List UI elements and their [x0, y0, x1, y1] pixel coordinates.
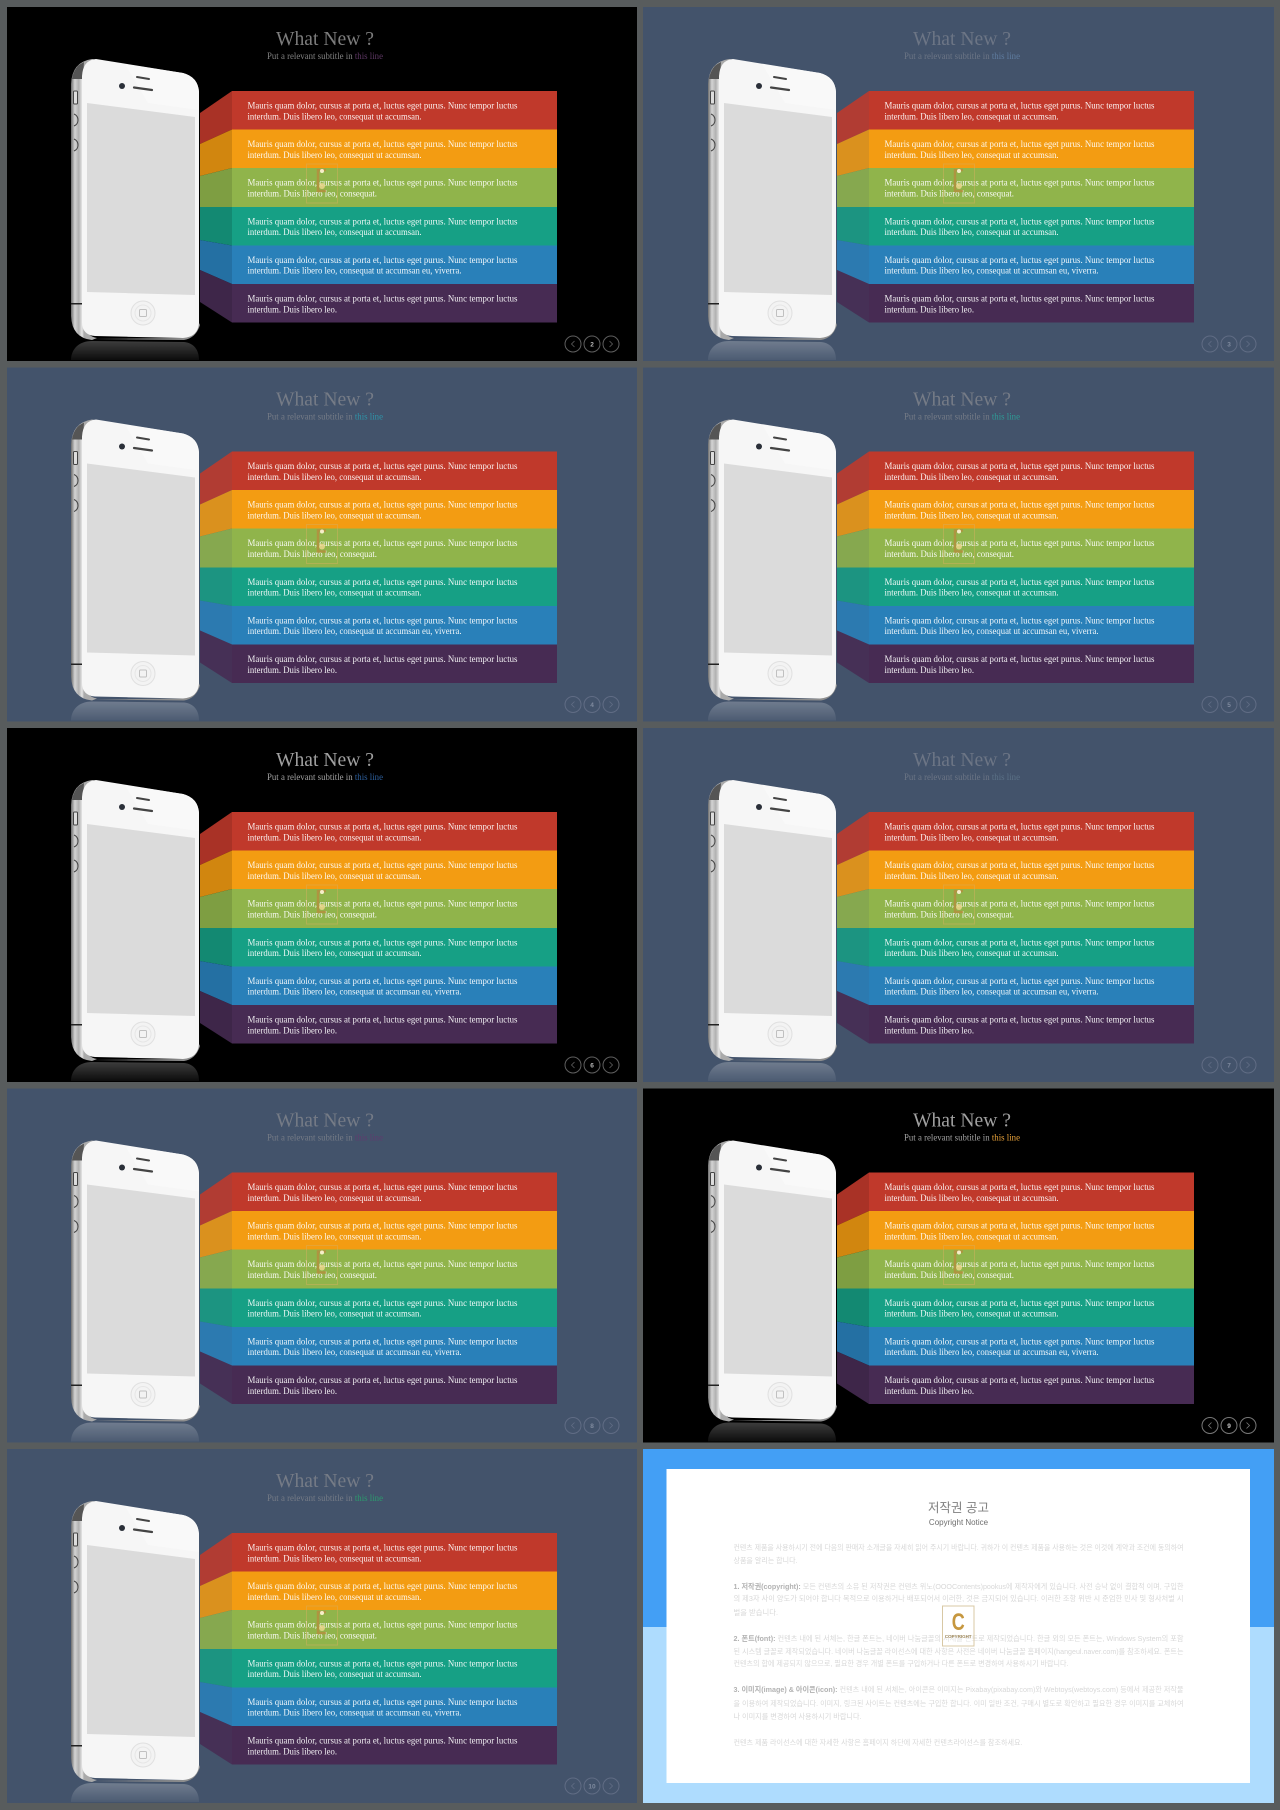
text block: bands: Mauris quam dolor, cursus at porta et, luctus eget purus. Nunc tempor luctus [248, 140, 518, 150]
text block: section 2 font: 컨텐츠의 합에 제공되지 않으므로, 필요한 경우 개별 폰트를 구입하거나 다른 폰트로 변경하여 사용하시기 바랍니다. [734, 1658, 1068, 1668]
text block: section 3 image and icon: 3. 이미지(image) & 아이콘(icon): 컨텐츠 내에 된 서체는, 아이콘은 이미지는 Pixabay(pixabay.com)와 Webtoys(webtoys.com) 등에서 제공한 저작물 [734, 1684, 1184, 1694]
text block: closing note: 컨텐츠 제품 라이선스에 대한 자세한 사항은 홈페이지 하단에 자세한 컨텐츠라이선스를 참조하세요. [734, 1737, 1022, 1747]
text block: intro [734, 1542, 1184, 1565]
icon: phone [71, 1501, 200, 1802]
text block: bands: interdum. Duis libero leo, consequat ut accumsan. [884, 112, 1058, 122]
text block: bands: Mauris quam dolor, cursus at porta et, luctus eget purus. Nunc tempor luctus [248, 1260, 518, 1270]
text block: intro: 컨텐츠 제품을 사용하시기 전에 다음의 판매자 소개글을 자세히 읽어 주시기 바랍니다. 귀하가 이 컨텐츠 제품을 사용하는 것은 이것에 계약과 조건에 동의하여 [734, 1542, 1184, 1552]
text block: bands: Mauris quam dolor, cursus at porta et, luctus eget purus. Nunc tempor luctus [248, 256, 518, 266]
page navigation: 6 [590, 1062, 594, 1070]
colour bands [837, 91, 1194, 322]
text block: bands: interdum. Duis libero leo, consequat ut accumsan. [248, 833, 422, 843]
text block: bands: Mauris quam dolor, cursus at porta et, luctus eget purus. Nunc tempor luctus [248, 938, 518, 948]
text block: bands: interdum. Duis libero leo, consequat ut accumsan. [248, 1554, 422, 1564]
text block: bands: interdum. Duis libero leo, consequat. [248, 190, 377, 200]
text block: bands: Mauris quam dolor, cursus at porta et, luctus eget purus. Nunc tempor luctus [884, 938, 1155, 948]
colour bands [837, 452, 1194, 683]
text block: bands: Mauris quam dolor, cursus at porta et, luctus eget purus. Nunc tempor luctus [248, 101, 518, 111]
icon: phone [71, 59, 200, 360]
text block: section 2 font [734, 1633, 1184, 1668]
text block: bands: Mauris quam dolor, cursus at porta et, luctus eget purus. Nunc tempor luctus [884, 1015, 1155, 1025]
text block: section 1 copyright: 의 제3자 사이 양도가 되어야 합니다 목적으로 이용하거나 배포되어서 이러한, 것은 금지되어 있습니다. 이러한 조항 위반 시 준엄한 민사 및 형사처벌 시 [734, 1593, 1184, 1603]
text block: bands: interdum. Duis libero leo, consequat ut accumsan eu, viverra. [248, 627, 462, 637]
text block: bands [248, 822, 518, 1036]
page navigation [565, 1057, 619, 1073]
page navigation: 7 [1227, 1062, 1231, 1070]
watermark [306, 524, 338, 564]
text block: bands: interdum. Duis libero leo, consequat ut accumsan eu, viverra. [248, 1709, 462, 1719]
watermark: copyright badge [942, 1606, 974, 1646]
text block: bands: interdum. Duis libero leo, consequat. [884, 911, 1014, 921]
text block: bands: interdum. Duis libero leo, consequat ut accumsan. [248, 1310, 422, 1320]
page navigation: 8 [590, 1423, 594, 1430]
panel: slide 9 black [643, 1088, 1274, 1442]
text block: bands: Mauris quam dolor, cursus at porta et, luctus eget purus. Nunc tempor luctus [248, 1543, 518, 1553]
text block: bands: Mauris quam dolor, cursus at porta et, luctus eget purus. Nunc tempor luctus [884, 1183, 1155, 1193]
text block: bands: interdum. Duis libero leo, consequat ut accumsan. [248, 1593, 422, 1603]
panel: slide 5 slate [643, 368, 1274, 722]
text block: bands: interdum. Duis libero leo, consequat ut accumsan. [248, 112, 422, 122]
colour bands [200, 452, 557, 683]
text block: bands: interdum. Duis libero leo, consequat. [248, 1632, 377, 1642]
text block: bands: interdum. Duis libero leo, consequat ut accumsan. [248, 949, 422, 959]
text block: bands: Mauris quam dolor, cursus at porta et, luctus eget purus. Nunc tempor luctus [884, 101, 1155, 111]
text block: bands: Mauris quam dolor, cursus at porta et, luctus eget purus. Nunc tempor luctus [884, 256, 1155, 266]
text block: bands: interdum. Duis libero leo, consequat ut accumsan. [884, 512, 1058, 522]
page navigation [1202, 696, 1256, 712]
heading: copyright notice Korean: 저작권 공고 [928, 1501, 989, 1515]
panel: slide 4 slate [7, 368, 637, 722]
text block: bands: interdum. Duis libero leo, consequat ut accumsan. [248, 872, 422, 882]
title: What New ? [276, 1470, 374, 1492]
watermark [306, 1246, 338, 1284]
text block: bands: interdum. Duis libero leo, consequat ut accumsan. [248, 1232, 422, 1242]
title: What New ? [913, 388, 1011, 410]
text block: bands: Mauris quam dolor, cursus at porta et, luctus eget purus. Nunc tempor luctus [248, 1183, 518, 1193]
text block: bands: interdum. Duis libero leo, consequat. [884, 190, 1014, 200]
subtitle: Put a relevant subtitle in this line [267, 1494, 383, 1504]
text block: bands: Mauris quam dolor, cursus at porta et, luctus eget purus. Nunc tempor luctus [884, 539, 1155, 549]
text block: bands: interdum. Duis libero leo, consequat. [248, 1271, 377, 1281]
text block: bands: interdum. Duis libero leo, consequat. [248, 911, 377, 921]
watermark [944, 164, 974, 203]
text block: bands: interdum. Duis libero leo, consequat ut accumsan. [248, 512, 422, 522]
page navigation: 3 [1227, 342, 1231, 348]
page navigation: 9 [1227, 1423, 1231, 1430]
text block: bands: Mauris quam dolor, cursus at porta et, luctus eget purus. Nunc tempor luctus [248, 500, 518, 510]
text block: bands: interdum. Duis libero leo, consequat ut accumsan. [884, 1194, 1058, 1204]
text block: bands: interdum. Duis libero leo, consequat ut accumsan. [884, 1310, 1058, 1320]
text block: bands: interdum. Duis libero leo. [884, 1387, 974, 1397]
watermark [306, 885, 338, 924]
page navigation [1202, 1057, 1256, 1073]
text block: bands: interdum. Duis libero leo, consequat ut accumsan eu, viverra. [248, 1348, 462, 1358]
text block: bands: interdum. Duis libero leo, consequat ut accumsan. [248, 473, 422, 483]
text block: bands: Mauris quam dolor, cursus at porta et, luctus eget purus. Nunc tempor luctus [884, 578, 1155, 588]
text block: section 1 copyright: 벌을 받습니다. [734, 1607, 778, 1617]
icon: phone [708, 780, 837, 1081]
text block: bands: interdum. Duis libero leo, consequat ut accumsan eu, viverra. [884, 988, 1098, 998]
text block: bands: interdum. Duis libero leo. [884, 305, 974, 315]
text block: bands: interdum. Duis libero leo, consequat ut accumsan. [248, 151, 422, 161]
text block: bands: interdum. Duis libero leo, consequat ut accumsan. [248, 1194, 422, 1204]
text block: bands: Mauris quam dolor, cursus at porta et, luctus eget purus. Nunc tempor luctus [248, 1582, 518, 1592]
title: What New ? [913, 1110, 1011, 1132]
text block: bands: interdum. Duis libero leo, consequat ut accumsan eu, viverra. [884, 267, 1098, 277]
icon: phone [708, 1140, 837, 1442]
text block: bands: Mauris quam dolor, cursus at porta et, luctus eget purus. Nunc tempor luctus [248, 1222, 518, 1232]
text block: section 2 font: 2. 폰트(font): 컨텐츠 내에 된 서체는, 한글 폰트는, 네이버 나눔글꼴의 서체를 폰트로 제작되었습니다. 한글 외의 모든 폰트는, Windows System의 포함 [734, 1633, 1184, 1643]
text block: bands: Mauris quam dolor, cursus at porta et, luctus eget purus. Nunc tempor luctus [248, 1659, 518, 1669]
text block: bands [248, 1183, 518, 1397]
text block: bands: Mauris quam dolor, cursus at porta et, luctus eget purus. Nunc tempor luctus [884, 179, 1155, 189]
text block: bands: Mauris quam dolor, cursus at porta et, luctus eget purus. Nunc tempor luctus [248, 1621, 518, 1631]
watermark [944, 524, 974, 564]
text block: bands: interdum. Duis libero leo. [248, 1747, 337, 1757]
page navigation [1202, 336, 1256, 352]
text block: section 3 image and icon: 나 이미지를 변경하여 사용하시기 바랍니다. [734, 1711, 862, 1721]
text block: intro: 상품을 알리는 합니다. [734, 1555, 798, 1565]
colour bands [200, 1172, 557, 1404]
text block: bands [884, 101, 1155, 315]
colour bands [200, 91, 557, 322]
subtitle: Put a relevant subtitle in this line [267, 773, 383, 783]
colour bands [200, 812, 557, 1044]
subtitle: Put a relevant subtitle in this line [904, 52, 1020, 62]
subtitle: Put a relevant subtitle in this line [904, 773, 1020, 783]
title: What New ? [913, 28, 1011, 50]
panel: slide 2 black [7, 7, 637, 361]
text block: bands: interdum. Duis libero leo, consequat ut accumsan. [884, 588, 1058, 598]
icon: phone [71, 420, 200, 720]
text block: bands: Mauris quam dolor, cursus at porta et, luctus eget purus. Nunc tempor luctus [248, 1015, 518, 1025]
text block: section 1 copyright: 1. 저작권(copyright): 모든 컨텐츠의 소유 된 저작권은 컨텐츠 위노(OOOContents)pookus에 제작자에게 있습니다. 사전 승낙 없이 결합적 이며, 구입한 [734, 1581, 1184, 1591]
text block: bands: Mauris quam dolor, cursus at porta et, luctus eget purus. Nunc tempor luctus [248, 1376, 518, 1386]
panel: slide 10 slate [7, 1449, 637, 1803]
text block: bands: Mauris quam dolor, cursus at porta et, luctus eget purus. Nunc tempor luctus [884, 616, 1155, 626]
text block: bands: Mauris quam dolor, cursus at porta et, luctus eget purus. Nunc tempor luctus [884, 1299, 1155, 1309]
text block: bands: Mauris quam dolor, cursus at porta et, luctus eget purus. Nunc tempor luctus [884, 500, 1155, 510]
page navigation [565, 336, 619, 352]
text block: bands: Mauris quam dolor, cursus at porta et, luctus eget purus. Nunc tempor luctus [248, 616, 518, 626]
text block: bands: Mauris quam dolor, cursus at porta et, luctus eget purus. Nunc tempor luctus [884, 1222, 1155, 1232]
watermark [944, 885, 974, 924]
text block: section 2 font: 된 시스템 글꼴로 제작되었습니다. 네이버 나눔글꼴 라이선스에 대한 사항은 사전은 네이버 나눔글꼴 홈페이지(hangeul.naver.com)를 참조하세요. 폰트는 [734, 1646, 1184, 1656]
text block: bands: Mauris quam dolor, cursus at porta et, luctus eget purus. Nunc tempor luctus [884, 140, 1155, 150]
watermark: copyright badge: COPYRIGHT [945, 1634, 972, 1639]
text block: section 1 copyright [734, 1581, 1184, 1617]
text block: bands: Mauris quam dolor, cursus at porta et, luctus eget purus. Nunc tempor luctus [248, 217, 518, 227]
text block: bands: interdum. Duis libero leo, consequat ut accumsan eu, viverra. [884, 627, 1098, 637]
text block: bands: Mauris quam dolor, cursus at porta et, luctus eget purus. Nunc tempor luctus [884, 822, 1155, 832]
text block: bands: interdum. Duis libero leo, consequat ut accumsan eu, viverra. [248, 988, 462, 998]
text block: bands: interdum. Duis libero leo, consequat. [884, 1271, 1014, 1281]
text block: bands: interdum. Duis libero leo. [884, 1026, 974, 1036]
title: What New ? [913, 749, 1011, 771]
text block: bands [884, 822, 1155, 1036]
text block: bands: interdum. Duis libero leo, consequat ut accumsan. [248, 1670, 422, 1680]
text block: bands: interdum. Duis libero leo, consequat ut accumsan. [884, 872, 1058, 882]
text block: bands: Mauris quam dolor, cursus at porta et, luctus eget purus. Nunc tempor luctus [884, 1376, 1155, 1386]
text block: bands [248, 101, 518, 315]
panel: slide 8 slate [7, 1088, 637, 1442]
page navigation: 10 [588, 1784, 596, 1790]
watermark [306, 1606, 338, 1645]
subtitle: Put a relevant subtitle in this line [904, 1134, 1020, 1144]
text block: bands: Mauris quam dolor, cursus at porta et, luctus eget purus. Nunc tempor luctus [884, 462, 1155, 472]
text block: bands: Mauris quam dolor, cursus at porta et, luctus eget purus. Nunc tempor luctus [248, 294, 518, 304]
watermark: copyright badge: C [952, 1609, 965, 1636]
page navigation [565, 1418, 619, 1434]
text block: bands: Mauris quam dolor, cursus at porta et, luctus eget purus. Nunc tempor luctus [248, 822, 518, 832]
text block: bands: interdum. Duis libero leo, consequat ut accumsan eu, viverra. [884, 1348, 1098, 1358]
page navigation: 5 [1227, 702, 1231, 709]
text block: bands: Mauris quam dolor, cursus at porta et, luctus eget purus. Nunc tempor luctus [884, 1338, 1155, 1348]
subtitle: Put a relevant subtitle in this line [904, 412, 1020, 422]
text block: bands [248, 1543, 518, 1757]
title: What New ? [276, 28, 374, 50]
text block: section 3 image and icon [734, 1684, 1184, 1721]
text block: bands: Mauris quam dolor, cursus at porta et, luctus eget purus. Nunc tempor luctus [248, 1338, 518, 1348]
text block: bands: interdum. Duis libero leo, consequat ut accumsan. [884, 473, 1058, 483]
panel: slide 7 slate [643, 728, 1274, 1082]
text block: bands [248, 462, 518, 676]
title: What New ? [276, 388, 374, 410]
page navigation: 4 [590, 702, 594, 709]
page navigation [565, 1778, 619, 1794]
text block: bands: Mauris quam dolor, cursus at porta et, luctus eget purus. Nunc tempor luctus [248, 539, 518, 549]
text block: bands: Mauris quam dolor, cursus at porta et, luctus eget purus. Nunc tempor luctus [248, 578, 518, 588]
text block: bands: Mauris quam dolor, cursus at porta et, luctus eget purus. Nunc tempor luctus [884, 861, 1155, 871]
page navigation: 2 [590, 342, 594, 348]
text block: bands: interdum. Duis libero leo, consequat ut accumsan. [248, 588, 422, 598]
text block: bands: Mauris quam dolor, cursus at porta et, luctus eget purus. Nunc tempor luctus [248, 861, 518, 871]
text block: bands: Mauris quam dolor, cursus at porta et, luctus eget purus. Nunc tempor luctus [248, 1698, 518, 1708]
icon: phone [71, 1140, 200, 1442]
text block: bands [884, 1183, 1155, 1397]
text block: bands: Mauris quam dolor, cursus at porta et, luctus eget purus. Nunc tempor luctus [248, 977, 518, 987]
text block: bands: Mauris quam dolor, cursus at porta et, luctus eget purus. Nunc tempor luctus [884, 294, 1155, 304]
text block: bands: interdum. Duis libero leo, consequat. [884, 550, 1014, 560]
text block: bands: Mauris quam dolor, cursus at porta et, luctus eget purus. Nunc tempor luctus [248, 462, 518, 472]
text block: bands: Mauris quam dolor, cursus at porta et, luctus eget purus. Nunc tempor luctus [248, 1299, 518, 1309]
colour bands [837, 812, 1194, 1044]
text block: bands: Mauris quam dolor, cursus at porta et, luctus eget purus. Nunc tempor luctus [248, 900, 518, 910]
subtitle: Put a relevant subtitle in this line [267, 1134, 383, 1144]
text block: bands: interdum. Duis libero leo, consequat ut accumsan. [884, 228, 1058, 238]
watermark [944, 1246, 974, 1284]
icon: phone [708, 420, 837, 720]
text block: bands [884, 462, 1155, 676]
text block: bands: interdum. Duis libero leo, consequat ut accumsan. [884, 1232, 1058, 1242]
text block: bands: interdum. Duis libero leo. [248, 1026, 337, 1036]
text block: bands: Mauris quam dolor, cursus at porta et, luctus eget purus. Nunc tempor luctus [884, 217, 1155, 227]
text block: bands: interdum. Duis libero leo. [248, 1387, 337, 1397]
page navigation [1202, 1418, 1256, 1434]
icon: phone [71, 780, 200, 1081]
subtitle: Put a relevant subtitle in this line [267, 52, 383, 62]
text block: bands: interdum. Duis libero leo. [248, 305, 337, 315]
text block: bands: interdum. Duis libero leo, consequat ut accumsan. [248, 228, 422, 238]
text block: bands: interdum. Duis libero leo, consequat ut accumsan. [884, 949, 1058, 959]
watermark [306, 164, 338, 203]
title: What New ? [276, 1110, 374, 1132]
text block: bands: interdum. Duis libero leo. [248, 666, 337, 676]
icon: phone [708, 59, 837, 360]
colour bands [200, 1533, 557, 1764]
title: What New ? [276, 749, 374, 771]
panel: slide 6 black [7, 728, 637, 1082]
text block: bands: interdum. Duis libero leo, consequat ut accumsan. [884, 151, 1058, 161]
panel: copyright notice [643, 1449, 1274, 1803]
subtitle: Put a relevant subtitle in this line [267, 412, 383, 422]
text block: bands: Mauris quam dolor, cursus at porta et, luctus eget purus. Nunc tempor luctus [884, 900, 1155, 910]
colour bands [837, 1172, 1194, 1404]
text block: bands: interdum. Duis libero leo, consequat ut accumsan. [884, 833, 1058, 843]
text block: bands: Mauris quam dolor, cursus at porta et, luctus eget purus. Nunc tempor luctus [884, 977, 1155, 987]
text block: bands: Mauris quam dolor, cursus at porta et, luctus eget purus. Nunc tempor luctus [884, 655, 1155, 665]
text block: bands: Mauris quam dolor, cursus at porta et, luctus eget purus. Nunc tempor luctus [248, 655, 518, 665]
page navigation [565, 696, 619, 712]
panel: slide 3 slate [643, 7, 1274, 361]
heading: copyright notice English: Copyright Notice [929, 1518, 989, 1527]
text block: section 3 image and icon: 을 이용하여 제작되었습니다. 이미지, 링크된 사이트는 컨텐츠에는 구입한 합니다. 이미 일반 조건, 구매시 별도로 확인하고 필요한 경우 이미지를 교체하여 [734, 1698, 1184, 1708]
text block: bands: Mauris quam dolor, cursus at porta et, luctus eget purus. Nunc tempor luctus [884, 1260, 1155, 1270]
text block: bands: interdum. Duis libero leo. [884, 666, 974, 676]
text block: bands: interdum. Duis libero leo, consequat. [248, 550, 377, 560]
text block: bands: Mauris quam dolor, cursus at porta et, luctus eget purus. Nunc tempor luctus [248, 179, 518, 189]
text block: bands: interdum. Duis libero leo, consequat ut accumsan eu, viverra. [248, 267, 462, 277]
text block: bands: Mauris quam dolor, cursus at porta et, luctus eget purus. Nunc tempor luctus [248, 1736, 518, 1746]
